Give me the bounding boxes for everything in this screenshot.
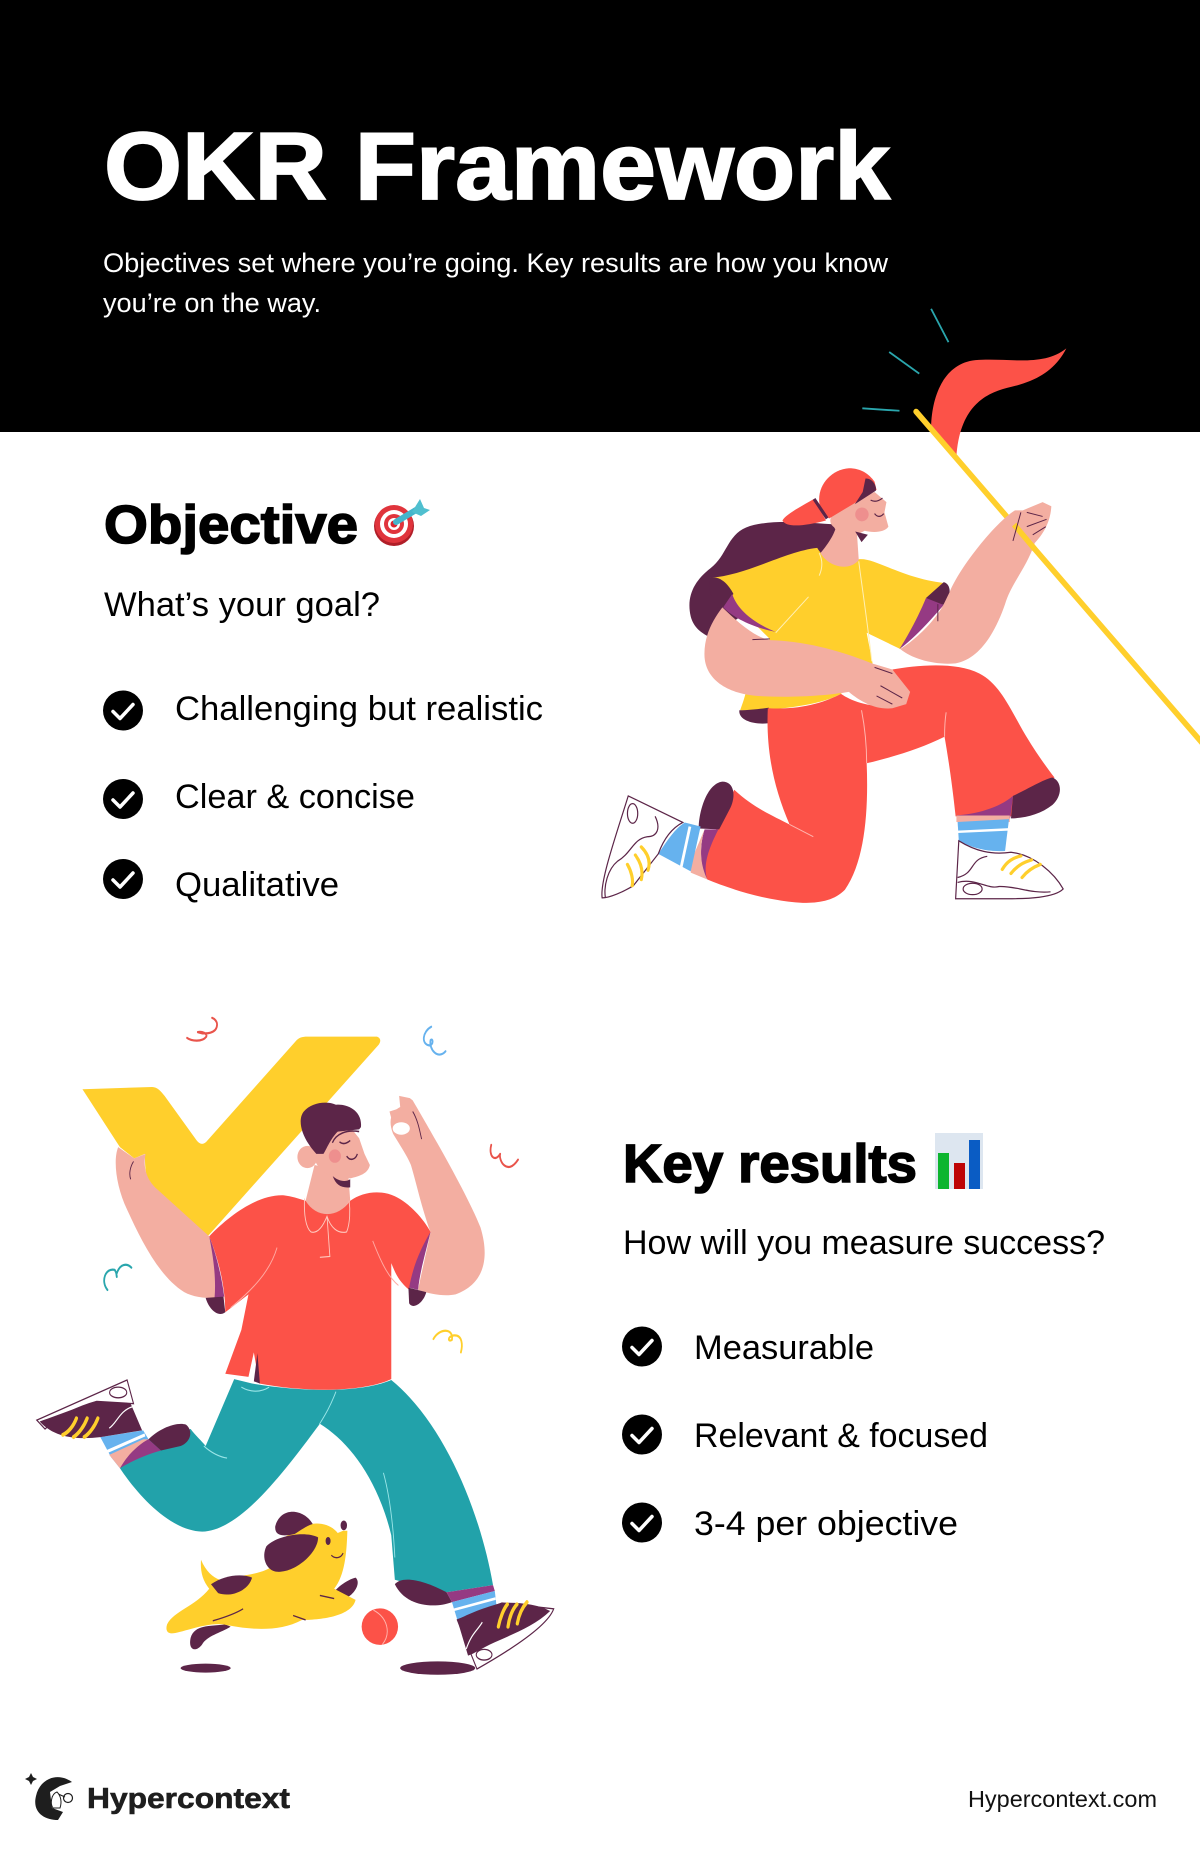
dog body bbox=[166, 1523, 356, 1633]
face bbox=[313, 1129, 370, 1178]
cap brim bbox=[782, 499, 826, 525]
text: measure success: How will you measure success? bbox=[623, 1224, 1105, 1262]
right sock stripe bbox=[958, 829, 1009, 832]
cuff right bbox=[1011, 778, 1060, 818]
left shoe bbox=[40, 1401, 142, 1438]
cap inside bbox=[855, 478, 876, 504]
cap bbox=[819, 468, 877, 518]
left cuff lining bbox=[120, 1439, 161, 1468]
collar bbox=[304, 1198, 350, 1257]
cheek bbox=[329, 1149, 341, 1163]
ear bbox=[830, 512, 848, 529]
dog ear back bbox=[275, 1512, 313, 1535]
arm left bbox=[116, 1147, 223, 1298]
right sock stripe bbox=[453, 1599, 496, 1610]
list: objective criteria bbox=[103, 690, 543, 904]
icon: bar chart emoji bbox=[935, 1133, 983, 1189]
subtitle: you’re on the way. bbox=[103, 288, 321, 318]
logo wordmark: Hypercontext bbox=[87, 1783, 290, 1815]
cap band bbox=[814, 499, 827, 518]
pants bbox=[705, 665, 1054, 903]
ball seam bbox=[373, 1610, 387, 1644]
item 2: Clear & concise bbox=[175, 778, 415, 816]
dog back leg bbox=[190, 1624, 231, 1649]
logo: Hypercontext mark bbox=[25, 1773, 72, 1820]
right shoe bbox=[457, 1603, 550, 1656]
ground shadows bbox=[181, 1661, 475, 1675]
sparkle rays bbox=[862, 309, 949, 411]
item 3: 3-4 per objective bbox=[694, 1505, 958, 1543]
cuff right lining bbox=[956, 796, 1013, 818]
check icon 2 bbox=[103, 779, 143, 819]
shirt hem bbox=[739, 708, 769, 724]
right shoe details bbox=[466, 1602, 527, 1660]
dog mouth and leg lines bbox=[213, 1553, 343, 1621]
left ankle skin bbox=[691, 829, 707, 880]
dog nose bbox=[341, 1520, 347, 1530]
ball bbox=[362, 1608, 398, 1645]
title: OKR Framework bbox=[104, 113, 891, 220]
item 1: Challenging but realistic bbox=[175, 690, 543, 728]
check icon 3 bbox=[103, 859, 143, 899]
left shoe bbox=[602, 796, 683, 898]
list: key result criteria bbox=[622, 1326, 988, 1543]
neck bbox=[820, 521, 859, 567]
hair bbox=[301, 1103, 361, 1154]
left sock bbox=[658, 822, 701, 871]
left ankle sock bbox=[100, 1430, 149, 1468]
hair strand bbox=[855, 532, 868, 542]
item 3: Qualitative bbox=[175, 866, 339, 904]
check icon 1 bbox=[103, 690, 143, 730]
right ankle skin bbox=[956, 816, 1010, 822]
shirt lines bbox=[231, 1241, 398, 1308]
flag pole bbox=[916, 412, 1200, 755]
right cuff bbox=[395, 1580, 452, 1605]
sleeve right bbox=[926, 582, 950, 605]
hair bbox=[689, 522, 837, 638]
left ankle skin bbox=[109, 1439, 149, 1468]
subtitle: Objectives set where you’re going. Key results are how you know bbox=[103, 248, 889, 278]
sleeve right bbox=[408, 1288, 426, 1306]
beard bbox=[333, 1176, 350, 1187]
check icon 2 bbox=[622, 1414, 662, 1454]
icon: target emoji bbox=[374, 499, 430, 546]
right cuff lining bbox=[447, 1585, 495, 1602]
sleeve right lining bbox=[899, 598, 944, 649]
hand fingers bbox=[389, 1107, 404, 1125]
sleeve right lining bbox=[409, 1232, 431, 1290]
cuff left lining bbox=[701, 829, 718, 880]
flag bbox=[931, 348, 1066, 457]
clothing lines bbox=[752, 512, 1047, 837]
pole over hand bbox=[1014, 525, 1035, 549]
sleeve left lining bbox=[723, 594, 776, 632]
shirt bbox=[710, 548, 944, 710]
shirt slit bbox=[254, 1353, 260, 1384]
text: what's your goal: What’s your goal? bbox=[104, 586, 380, 624]
dog bbox=[166, 1512, 358, 1649]
left cuff bbox=[149, 1424, 190, 1450]
dog eye bbox=[326, 1537, 331, 1545]
heading: Key results: Key results bbox=[623, 1134, 917, 1194]
heading: Objective: Objective bbox=[104, 495, 358, 555]
pants highlights bbox=[204, 1387, 395, 1558]
dog front paw bbox=[331, 1578, 358, 1598]
face lines bbox=[871, 498, 884, 516]
right sock bbox=[452, 1591, 497, 1620]
dog ear bbox=[264, 1534, 318, 1572]
illustration: woman with flag bbox=[602, 309, 1200, 903]
check icon 1 bbox=[622, 1326, 662, 1366]
check icon 3 bbox=[622, 1502, 662, 1542]
panel: black header bbox=[0, 0, 1200, 432]
thumb line bbox=[130, 1112, 422, 1179]
dog spot bbox=[211, 1575, 252, 1595]
right sock bbox=[958, 819, 1009, 851]
hand ring bbox=[393, 1122, 410, 1135]
right shoe details bbox=[958, 856, 1051, 895]
illustration: man with check mark and dog bbox=[37, 1018, 554, 1675]
item 1: Measurable bbox=[694, 1329, 874, 1367]
face bbox=[833, 492, 888, 539]
right shoe toe bbox=[457, 1603, 554, 1669]
item 2: Relevant & focused bbox=[694, 1417, 988, 1455]
left shoe details bbox=[63, 1387, 132, 1437]
left shoe upper bbox=[37, 1380, 134, 1429]
cheek bbox=[855, 507, 869, 521]
sleeve left bbox=[206, 1297, 225, 1314]
shirt bbox=[209, 1192, 431, 1390]
left sock stripe bbox=[107, 1435, 145, 1451]
right shoe bbox=[956, 841, 1063, 899]
left sock stripe bbox=[681, 827, 690, 869]
face lines bbox=[332, 1131, 359, 1159]
left shoe details bbox=[605, 804, 658, 897]
arm lowered bbox=[704, 607, 910, 709]
website: Hypercontext.com bbox=[968, 1786, 1157, 1812]
neck bbox=[306, 1165, 350, 1214]
sleeve left lining bbox=[209, 1236, 224, 1298]
subtitle bbox=[103, 248, 889, 318]
big check mark bbox=[82, 1037, 380, 1239]
arm right bbox=[391, 1096, 485, 1295]
confetti squiggles bbox=[104, 1018, 518, 1352]
pants bbox=[120, 1379, 493, 1592]
ear bbox=[297, 1146, 317, 1168]
arm raised bbox=[900, 502, 1051, 664]
sleeve left bbox=[709, 577, 733, 610]
cuff left bbox=[699, 782, 733, 829]
